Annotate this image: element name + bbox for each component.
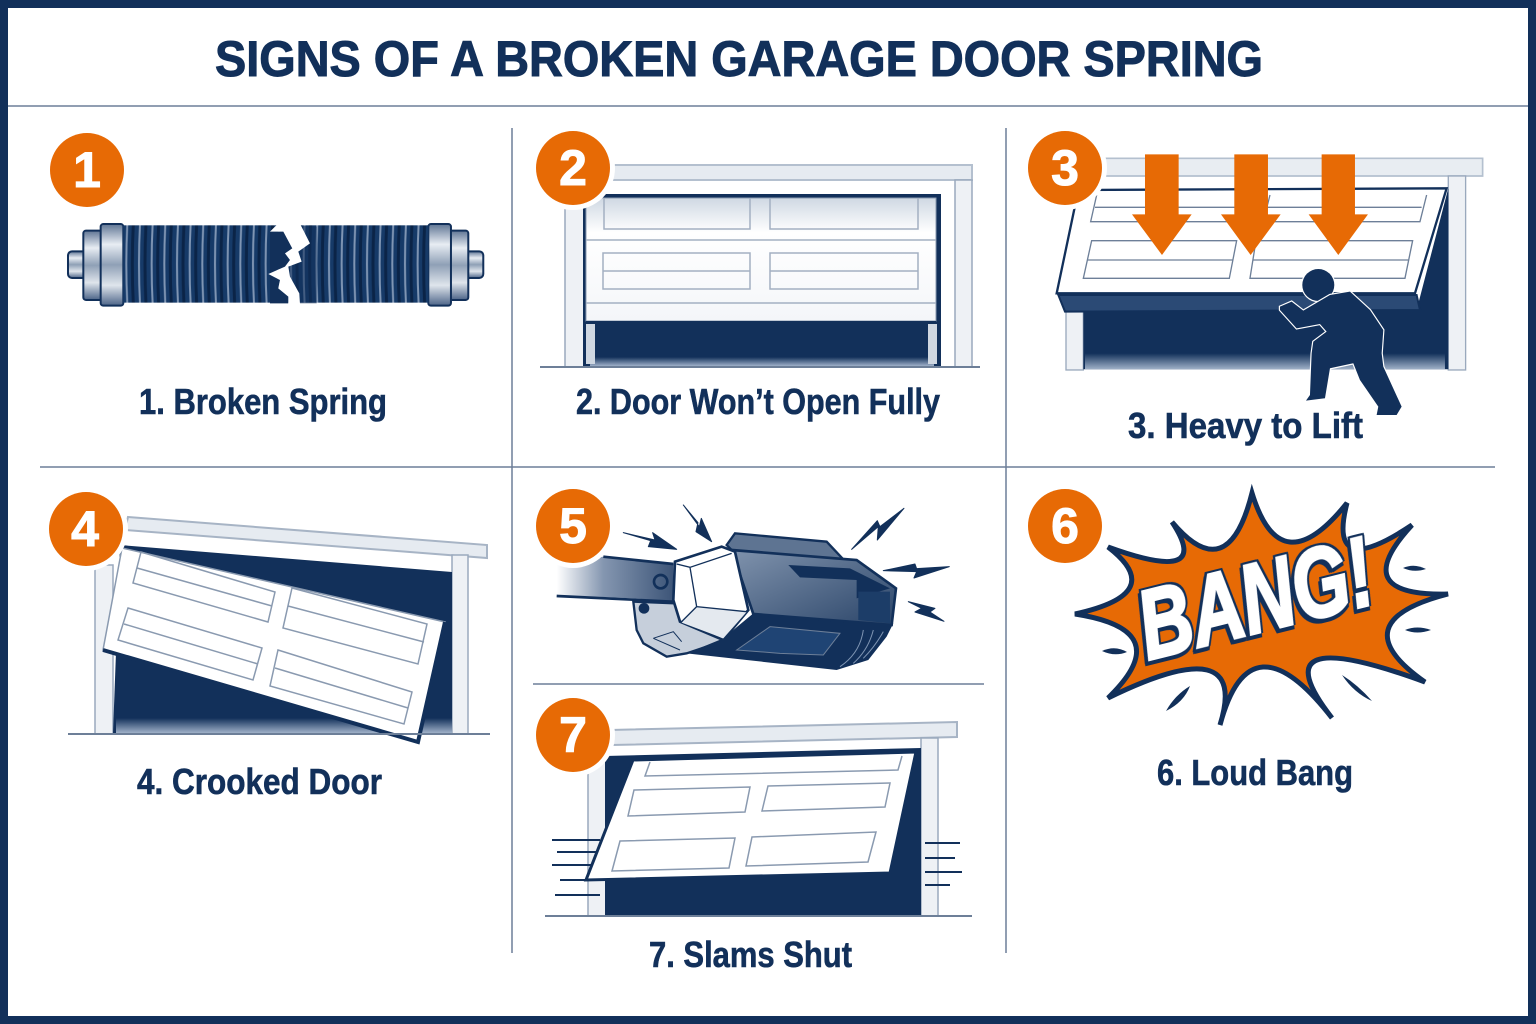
badge 6: 6 [1051, 498, 1079, 554]
icon: partly open door [540, 165, 980, 367]
panel: 4 crooked door [44, 487, 490, 802]
badge 7 [531, 693, 615, 777]
label 4: 4. Crooked Door [137, 761, 382, 802]
panel: 7 slams shut [531, 693, 972, 975]
label 6: 6. Loud Bang [1157, 752, 1353, 793]
badge 1 [50, 133, 124, 207]
badge 6 [1028, 489, 1102, 563]
panel: 1 broken spring [50, 133, 483, 422]
icon: bang burst [1075, 493, 1448, 725]
panel: 5 noisy opener [531, 484, 949, 670]
panel: 3 heavy to lift [1023, 126, 1483, 446]
bang text: BANG! [1126, 516, 1384, 680]
icon: crooked door [68, 517, 490, 742]
label 3: 3. Heavy to Lift [1128, 405, 1363, 446]
icon: heavy door with arrows and person [1057, 154, 1483, 415]
label 1: 1. Broken Spring [139, 381, 387, 422]
icon: falling door [545, 722, 972, 916]
label 7: 7. Slams Shut [649, 934, 852, 975]
badge 4: 4 [71, 501, 99, 557]
label 2: 2. Door Won’t Open Fully [576, 381, 940, 422]
badge 4 [44, 487, 128, 571]
badge 3 [1023, 126, 1107, 210]
badge 7: 7 [559, 707, 587, 763]
badge 5 [531, 484, 615, 568]
badge 2 [531, 126, 615, 210]
badge 3: 3 [1051, 140, 1079, 196]
icon: broken spring [68, 223, 483, 306]
title: SIGNS OF A BROKEN GARAGE DOOR SPRING [215, 31, 1263, 87]
panel: 2 door won't open fully [531, 126, 980, 422]
badge 1: 1 [73, 142, 101, 198]
icon: garage door opener [557, 505, 949, 670]
badge 2: 2 [559, 140, 587, 196]
badge 5: 5 [559, 498, 587, 554]
panel: 6 loud bang [1028, 489, 1448, 793]
